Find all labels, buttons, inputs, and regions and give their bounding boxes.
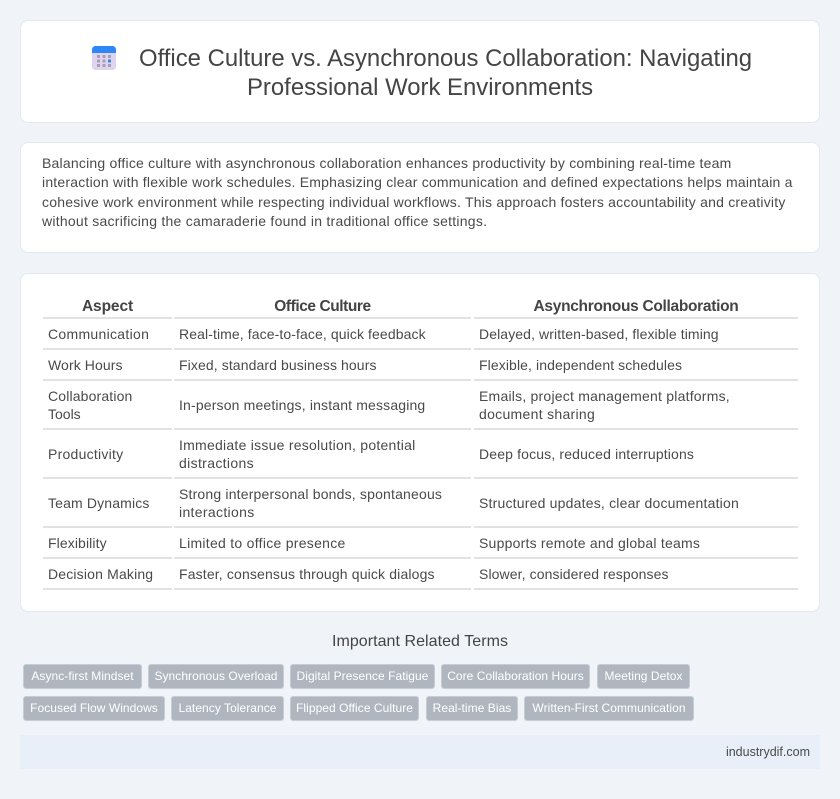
row: decision making: Decision Making: [48, 566, 153, 582]
row: flexibility: [48, 535, 700, 551]
tag: [524, 696, 694, 721]
tag: Async-first Mindset: [31, 669, 134, 683]
related terms heading: Important Related Terms: [332, 633, 508, 650]
tag: Focused Flow Windows: [30, 701, 158, 715]
intro paragraph: [42, 155, 793, 229]
column headers: Asynchronous Collaboration: [534, 298, 738, 315]
row: productivity: Productivity: [48, 446, 123, 462]
row: productivity: Immediate issue resolution, potential: [179, 437, 415, 453]
row: decision making: [48, 566, 669, 582]
row: communication: Communication: [48, 326, 149, 342]
row: collaboration tools: Tools: [48, 406, 81, 422]
row: communication: Delayed, written-based, flexible timing: [479, 326, 719, 342]
tag: [290, 696, 419, 721]
row: team dynamics: Team Dynamics: [48, 495, 150, 511]
row: team dynamics: [48, 486, 739, 520]
tag: [171, 696, 284, 721]
row: flexibility: Flexibility: [48, 535, 107, 551]
row: collaboration tools: Collaboration: [48, 388, 132, 404]
tag: [441, 664, 590, 689]
tag: Latency Tolerance: [178, 701, 277, 715]
column headers: [82, 298, 738, 315]
header panel: [20, 20, 820, 123]
intro paragraph: without sacrificing the camaraderie found in traditional office settings.: [42, 213, 487, 229]
tag: Flipped Office Culture: [296, 701, 413, 715]
footer source: industrydif.com: [726, 745, 810, 759]
column headers: Aspect: [82, 298, 133, 315]
icon: calendar: [92, 46, 116, 70]
title: Office Culture vs. Asynchronous Collaboration: Navigating: [139, 45, 752, 72]
tag: Synchronous Overload: [154, 669, 278, 683]
tag: Core Collaboration Hours: [447, 669, 584, 683]
row: decision making: Faster, consensus through quick dialogs: [179, 566, 435, 582]
row: decision making: Slower, considered responses: [479, 566, 669, 582]
comparison table panel: [20, 273, 820, 612]
tag: [23, 664, 142, 689]
row: work hours: Flexible, independent schedules: [479, 357, 682, 373]
row: team dynamics: Structured updates, clear documentation: [479, 495, 739, 511]
tag: Real-time Bias: [433, 701, 511, 715]
row: productivity: Deep focus, reduced interruptions: [479, 446, 694, 462]
row: flexibility: Limited to office presence: [179, 535, 346, 551]
row: productivity: distractions: [179, 455, 254, 471]
intro paragraph: interaction with flexible work schedules. Emphasizing clear communication and defined expectations helps maintain a: [42, 174, 793, 190]
tag: [148, 664, 284, 689]
related terms tags: [23, 664, 694, 721]
row: team dynamics: Strong interpersonal bonds, spontaneous: [179, 486, 442, 502]
tag: [426, 696, 518, 721]
row: team dynamics: interactions: [179, 504, 255, 520]
row: collaboration tools: In-person meetings, instant messaging: [179, 397, 425, 413]
column headers: Office Culture: [274, 298, 371, 315]
row: flexibility: Supports remote and global teams: [479, 535, 700, 551]
row: communication: Real-time, face-to-face, quick feedback: [179, 326, 426, 342]
intro paragraph: Balancing office culture with asynchronous collaboration enhances productivity by combining real-time team: [42, 155, 732, 171]
row: communication: [48, 326, 719, 342]
row: work hours: Work Hours: [48, 357, 123, 373]
tag: [597, 664, 690, 689]
row: work hours: Fixed, standard business hours: [179, 357, 377, 373]
intro paragraph: cohesive work environment while respecting individual workflows. This approach fosters accountability and creativity: [42, 194, 786, 210]
row: collaboration tools: [48, 388, 730, 422]
tag: [290, 664, 435, 689]
tag: [23, 696, 165, 721]
tag: Written-First Communication: [532, 701, 686, 715]
title: Professional Work Environments: [247, 74, 593, 101]
title: [139, 45, 752, 101]
comparison table: [43, 298, 798, 590]
footer bar: [20, 735, 820, 769]
intro text panel: [20, 142, 820, 253]
row: collaboration tools: Emails, project management platforms,: [479, 388, 730, 404]
row: collaboration tools: document sharing: [479, 406, 595, 422]
row: productivity: [48, 437, 694, 471]
tag: Digital Presence Fatigue: [297, 669, 428, 683]
row: work hours: [48, 357, 682, 373]
tag: Meeting Detox: [604, 669, 683, 683]
